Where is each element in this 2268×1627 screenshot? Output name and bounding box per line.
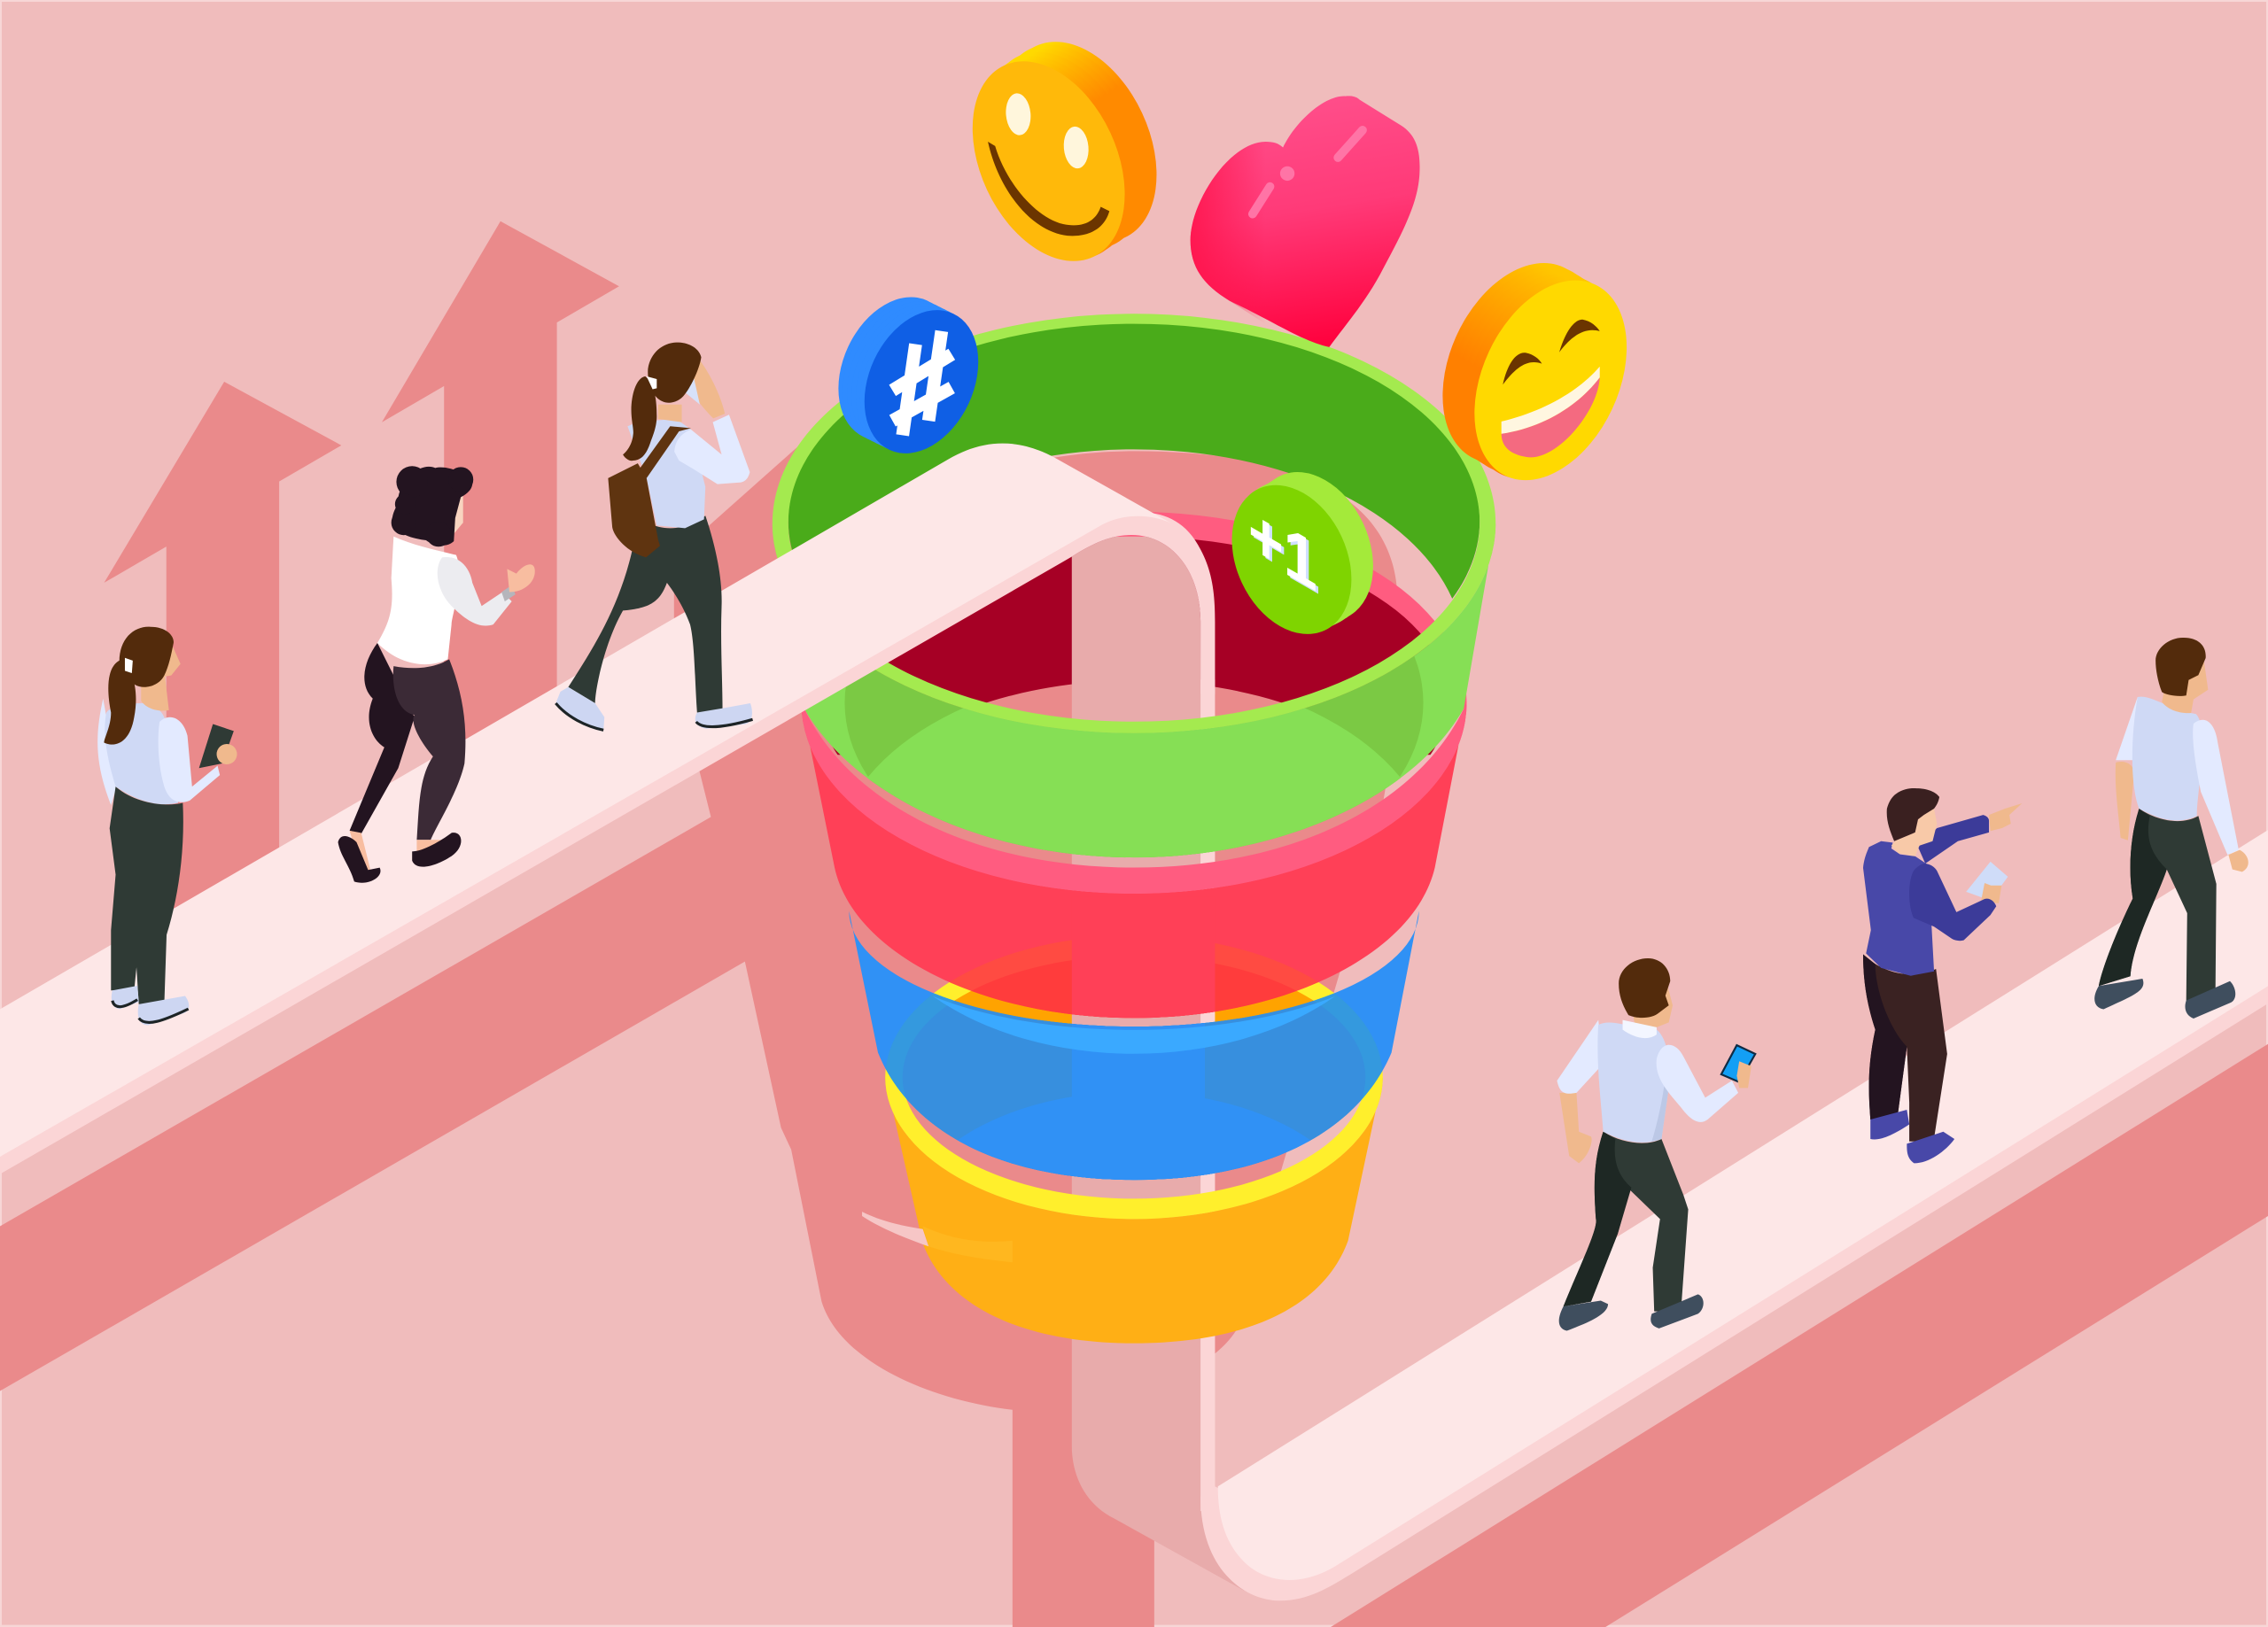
icon: plus one coin: +1 xyxy=(1251,492,1320,610)
funnel tier: yellow xyxy=(885,935,1383,1344)
icon: hashtag coin xyxy=(816,279,1000,472)
funnel shadow upper-left sliver xyxy=(674,416,897,622)
funnel tier: red xyxy=(802,512,1467,1019)
person: man walking far right xyxy=(2094,638,2249,1019)
pale streak beside yellow tier xyxy=(862,1212,928,1246)
person: woman with phone xyxy=(97,627,237,1025)
icon: plus one coin xyxy=(1208,453,1396,654)
growth arrow: right xyxy=(382,221,619,788)
icon: heart xyxy=(1191,96,1420,347)
funnel tier: blue xyxy=(849,910,1419,1180)
icon: plus one coin: +1 xyxy=(1248,490,1317,607)
translucent descending pole xyxy=(1072,535,1244,1591)
pole right edge strip xyxy=(1200,679,1215,1511)
yellow funnel back wall xyxy=(912,956,1356,1044)
growth arrow: left xyxy=(105,382,341,955)
person: curly haired woman xyxy=(338,466,535,883)
icon: laughing coin xyxy=(1412,238,1657,505)
red funnel back wall xyxy=(833,537,1435,755)
person: woman with backpack on phone xyxy=(555,343,753,730)
icon: smiley coin xyxy=(943,18,1187,285)
person: man with phone xyxy=(1557,958,1755,1331)
funnel and path cast shadow xyxy=(0,451,1398,1627)
funnel tier: green xyxy=(773,314,1495,857)
right walkway xyxy=(1200,830,2268,1600)
person: man in blue sweater pointing xyxy=(1863,788,2022,1163)
right path cast shadow xyxy=(1331,1044,2268,1627)
left walkway xyxy=(0,444,1215,1174)
